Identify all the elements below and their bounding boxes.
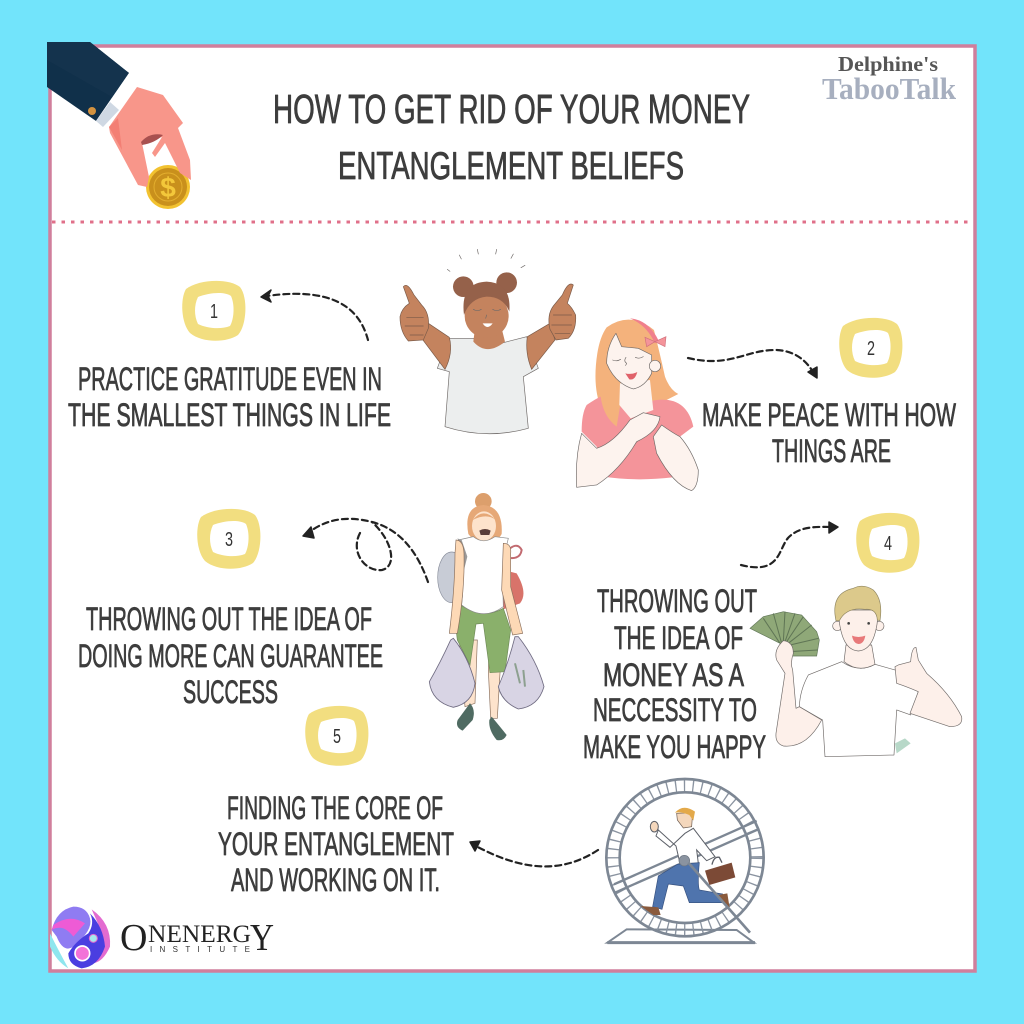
icon: hand holding gold coin xyxy=(47,42,191,209)
arrow 1 xyxy=(261,290,368,340)
logo: Onenergy Institute: INSTITUTE xyxy=(150,945,250,954)
logo: Onenergy Institute xyxy=(50,907,274,968)
badge 1: 1 xyxy=(210,301,218,323)
illustration: tired woman carrying bags xyxy=(429,493,544,740)
illustration: man running in hamster wheel xyxy=(606,779,764,943)
arrow 5 xyxy=(470,841,598,866)
badge 5: 5 xyxy=(333,726,341,748)
text: step 1 xyxy=(68,361,391,433)
text: step 2: THINGS ARE xyxy=(772,433,891,469)
logo: Onenergy Institute: NENERG xyxy=(148,921,251,948)
brand: Delphine's TabooTalk: Delphine's xyxy=(838,52,938,76)
illustration: girl with hands on chest xyxy=(576,318,698,491)
illustration: girl with thumbs up xyxy=(400,249,576,434)
badge 2 xyxy=(839,318,902,378)
text: step 3: SUCCESS xyxy=(183,674,278,710)
text: step 4 xyxy=(583,583,766,765)
title: HOW TO GET RID OF YOUR MONEY xyxy=(273,86,750,132)
text: step 5: YOUR ENTANGLEMENT xyxy=(218,826,454,862)
text: step 4: MONEY AS A xyxy=(603,657,744,693)
text: step 4: NECCESSITY TO xyxy=(593,692,757,728)
text: step 1: PRACTICE GRATITUDE EVEN IN xyxy=(78,361,382,397)
illustration: man with money and thumbs up xyxy=(750,586,962,757)
text: step 5 xyxy=(218,790,454,898)
text: step 4: THROWING OUT xyxy=(597,583,757,619)
text: step 3: DOING MORE CAN GUARANTEE xyxy=(78,638,383,674)
badge 1 xyxy=(182,281,245,341)
icon: hand holding gold coin: $ xyxy=(160,172,176,203)
brand: Delphine's TabooTalk xyxy=(822,52,957,106)
logo: Onenergy Institute: Y xyxy=(250,917,274,959)
arrow 2 xyxy=(688,350,817,378)
badge 4 xyxy=(856,513,919,573)
brand: Delphine's TabooTalk: TabooTalk xyxy=(822,71,957,106)
text: step 3 xyxy=(78,601,383,710)
arrow 4 xyxy=(741,522,838,567)
badge 3: 3 xyxy=(225,529,233,551)
badge 4: 4 xyxy=(884,533,892,555)
arrow 3 xyxy=(303,519,428,582)
logo: Onenergy Institute: O xyxy=(120,917,147,959)
icon: logo swirl xyxy=(50,907,110,968)
text: step 1: THE SMALLEST THINGS IN LIFE xyxy=(68,397,391,433)
badge 5 xyxy=(305,706,368,766)
title: ENTANGLEMENT BELIEFS xyxy=(338,145,684,188)
text: step 2 xyxy=(702,397,957,469)
text: step 3: THROWING OUT THE IDEA OF xyxy=(86,601,372,637)
title xyxy=(273,86,750,188)
text: step 5: FINDING THE CORE OF xyxy=(227,790,443,826)
text: step 5: AND WORKING ON IT. xyxy=(231,862,440,898)
badge 3 xyxy=(197,509,260,569)
text: step 4: THE IDEA OF xyxy=(614,620,743,656)
text: step 4: MAKE YOU HAPPY xyxy=(583,729,766,765)
badge 2: 2 xyxy=(867,338,875,360)
